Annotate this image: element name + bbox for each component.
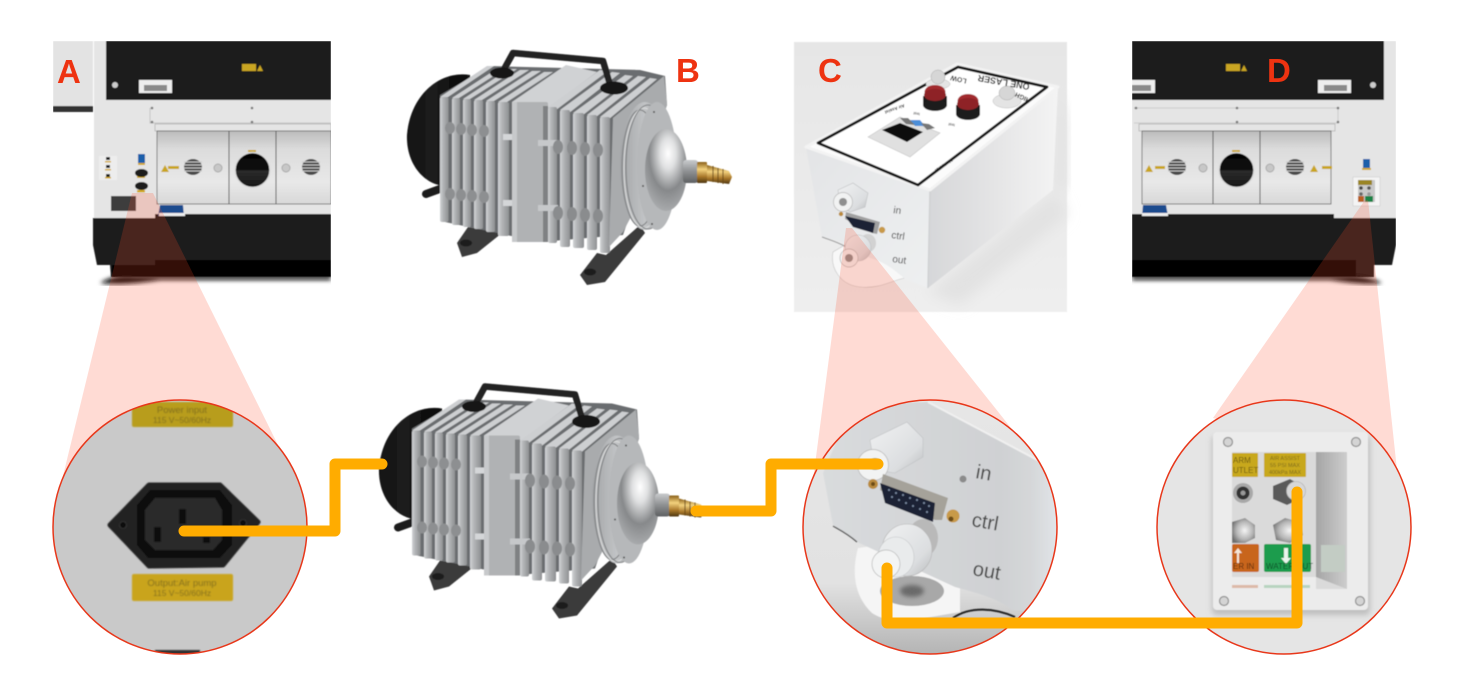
box face [824,402,1047,600]
air tube: control box out to machine inlet [887,492,1297,623]
output air pump label: Output:Air pump [147,578,217,589]
inverted top label text: test [947,122,955,128]
connection box [1354,178,1379,205]
port labels: in [893,205,902,217]
blue tag [1142,205,1168,216]
in fitting [834,183,868,212]
D-sub connector [868,474,960,522]
box front face [806,147,930,288]
inverted top label text: Air Assist [884,103,905,115]
port labels: in [974,461,993,486]
circle D: air assist inlet detail [1157,400,1411,654]
alarm outlet label: UTLET [1233,466,1258,475]
base disc [855,545,960,621]
output air pump label [132,574,233,601]
letter D: D [1267,52,1291,89]
black lid [1132,41,1384,100]
letter B: B [676,52,700,89]
power input label: Power input [157,405,207,416]
recessed panels with exhaust port [157,131,331,204]
port labels [972,464,1002,580]
port labels: ctrl [970,509,1000,536]
port labels: out [892,254,907,267]
small labels panel [104,156,112,179]
D-sub connector [839,212,885,234]
box top face [806,64,1058,190]
water out label: WATER OUT [1266,562,1313,571]
water out label [1264,544,1313,572]
power input label [132,402,233,427]
blue tag [158,205,185,216]
zoom wedge A [62,193,278,480]
circle background [53,400,307,654]
circle outline [803,400,1057,654]
port labels: out [971,558,1003,585]
circle A: power socket detail [53,400,307,656]
knobs and red buttons [923,70,1021,120]
circle background [803,400,1057,654]
black base [1132,214,1396,277]
lid handle [139,80,172,93]
floor shadow [100,276,331,284]
panel D: machine rear right side [1132,41,1396,284]
circle background [1157,400,1411,654]
air assist label: 400kPa MAX [1269,470,1301,476]
port labels: ctrl [891,230,905,243]
zoom wedge D [1213,200,1397,470]
water bolts [1232,518,1303,543]
inverted top label text: LOW [950,73,967,84]
output air pump label: 115 V~50/60Hz [153,588,211,598]
warning label [1226,64,1247,71]
black outlined label [818,67,1047,185]
port labels [891,205,907,267]
machine body [1132,41,1396,218]
alarm outlet label [1232,453,1258,477]
air pump in connection diagram [379,386,704,618]
out fitting [872,519,938,578]
inverted top label text: test [912,111,920,117]
out fitting [840,234,876,267]
panel C: air assist control box [794,42,1067,312]
water in label [1232,544,1259,572]
power input label: 115 V~50/60Hz [153,415,211,425]
inverted top label text: Air Assist [934,157,954,173]
alarm outlet label: ARM [1233,456,1251,465]
recessed panels with exhaust port [1142,131,1332,204]
inverted top label text: ONE LASER [976,73,1030,92]
blue switch and sockets [135,154,148,192]
power socket [110,485,258,566]
inner window [1232,452,1347,589]
panel A: machine rear left side [53,41,331,284]
machine side block [53,41,93,106]
air assist label [1264,453,1306,477]
floor shadow [1132,276,1382,284]
air assist label: 55 PSI MAX [1270,463,1300,469]
black base [93,214,331,277]
air assist label: AIR ASSIST [1270,456,1301,462]
circle outline [1157,400,1411,654]
inverted top label text [884,73,1032,173]
letter A: A [57,53,81,90]
in fitting [858,422,923,480]
box right face [928,87,1058,288]
mounting plate [1213,432,1368,610]
panel B: air pump product photo [407,53,732,285]
white base disc [832,242,905,287]
circle C: control box ports detail [803,400,1060,654]
lid handles [1132,80,1351,93]
alarm connector [1233,483,1253,503]
air tube: socket to pump [184,464,382,531]
plate screws [1220,438,1364,606]
letter C: C [818,52,842,89]
rating plate [111,196,136,211]
zoom wedge C [813,228,1015,480]
air fitting [1273,479,1306,505]
air tube: pump to control box in [696,464,878,511]
blue switch [1362,159,1371,170]
inverted top label text: HIGH [1014,90,1032,104]
black lid [106,41,331,100]
warning label [242,64,263,71]
circle outline [53,400,307,654]
display module [868,117,940,157]
water in label: ER IN [1233,562,1255,571]
